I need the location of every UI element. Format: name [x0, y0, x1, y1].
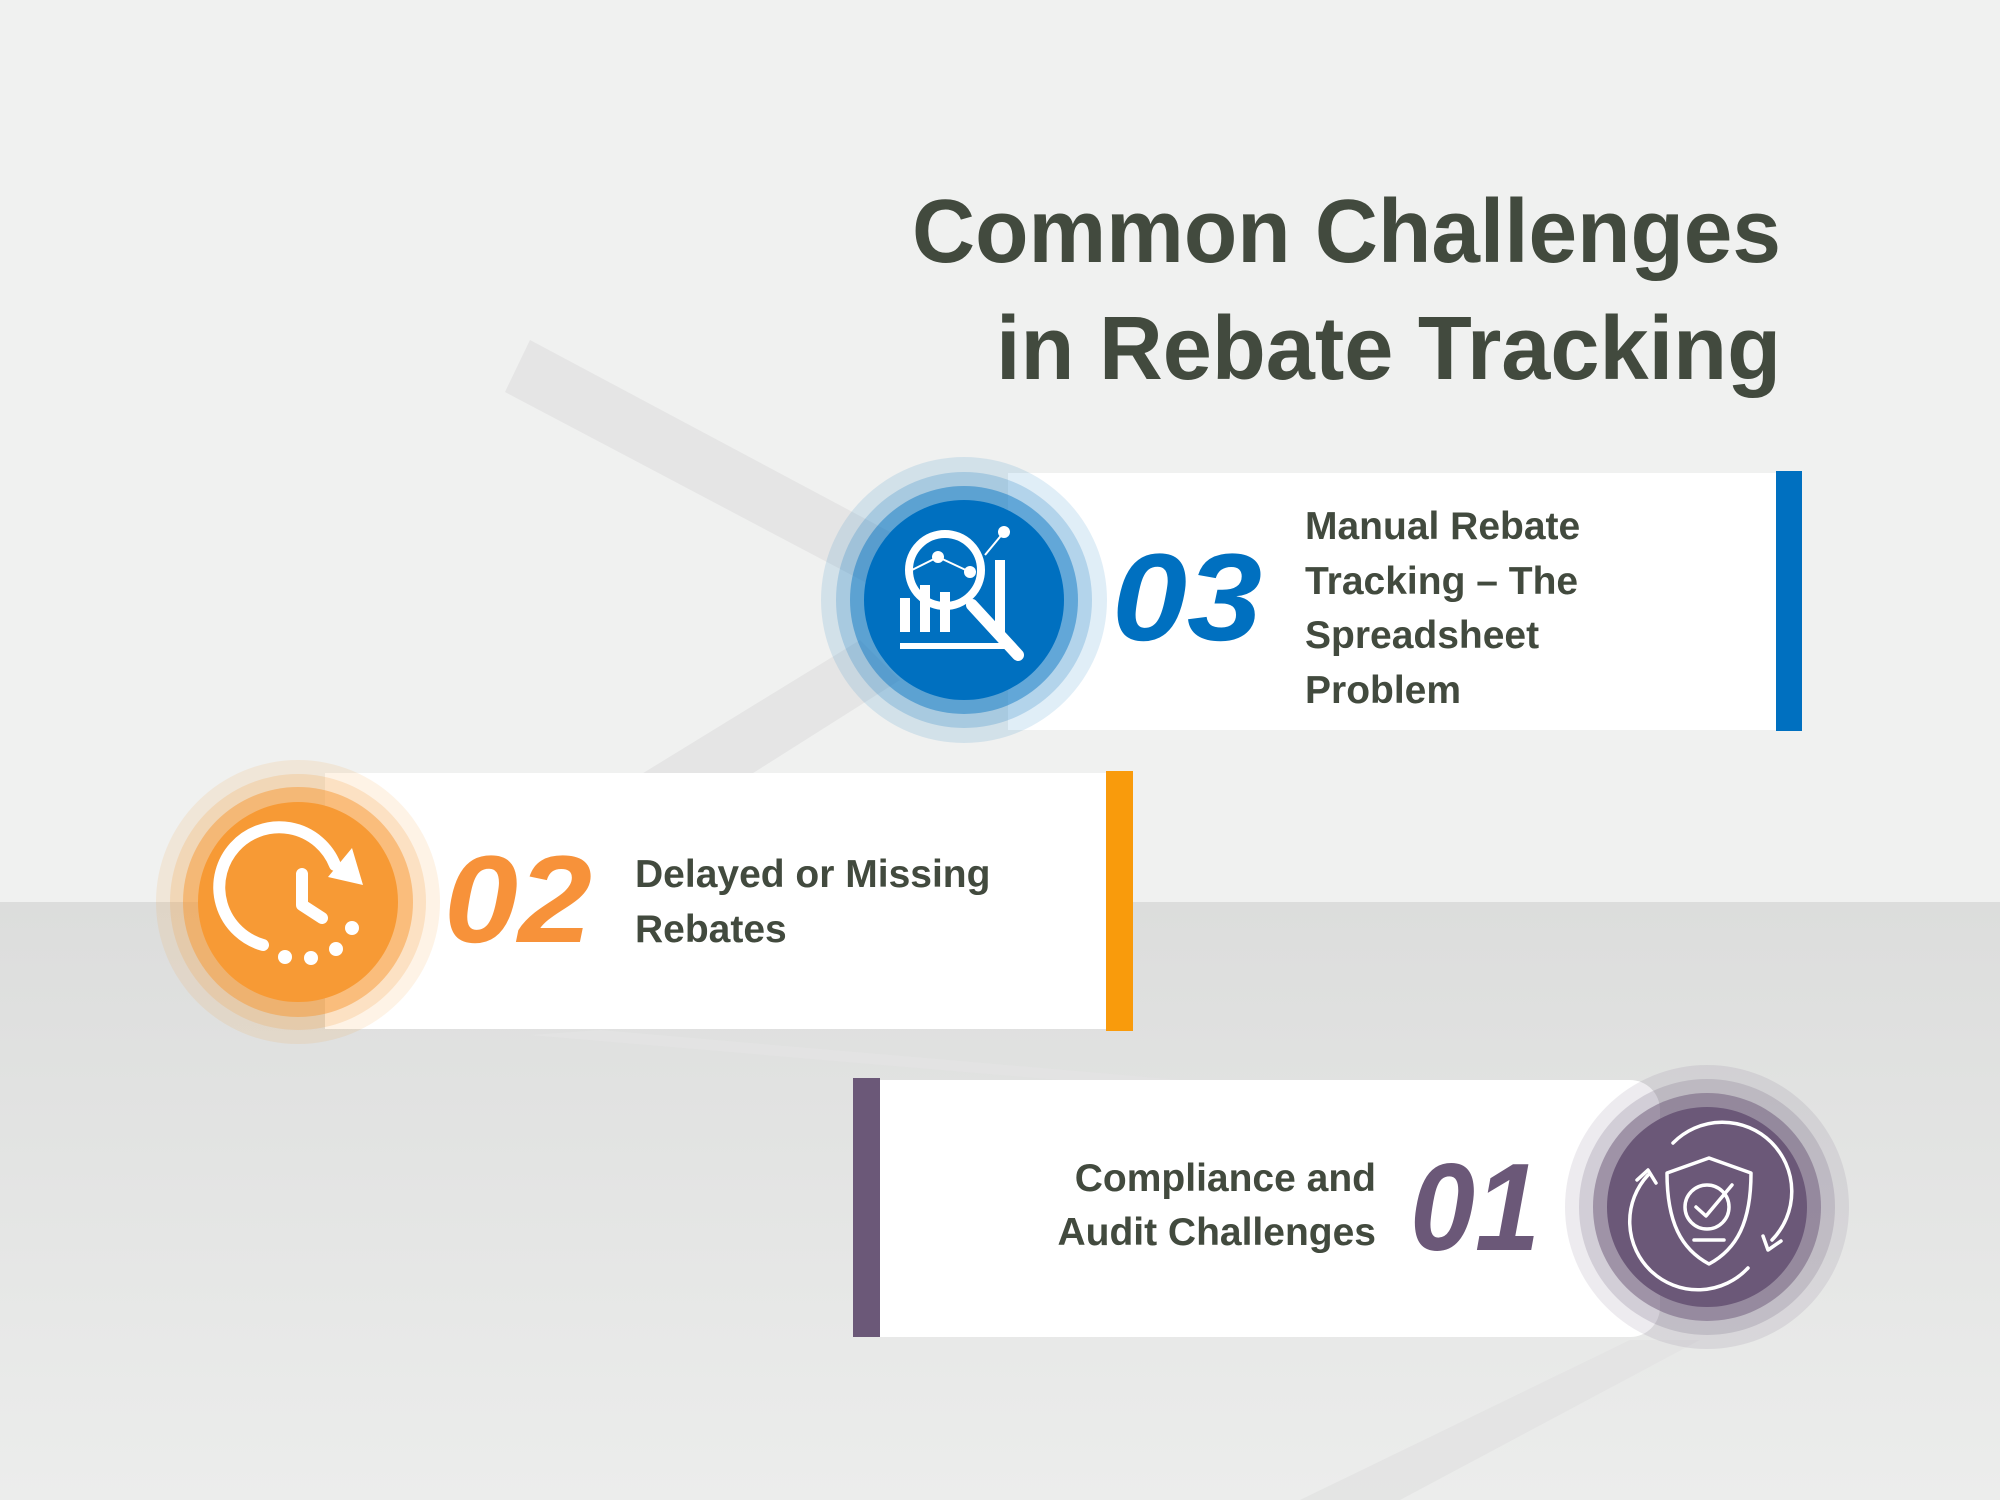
text: compliance and audit: Audit Challenges	[1057, 1211, 1376, 1254]
decorative stripes	[505, 340, 1700, 1500]
card 03: manual rebate tracking	[821, 457, 1802, 743]
text: delayed or missing	[635, 853, 990, 951]
icon: clock refresh (orange circle)	[156, 760, 440, 1044]
number 02: 02	[444, 831, 592, 969]
number 03: 03	[1112, 529, 1262, 667]
number 01: 01	[1410, 1139, 1540, 1277]
text: delayed or missing: Rebates	[635, 908, 787, 951]
text: compliance and audit	[1057, 1157, 1376, 1254]
text: manual rebate tracking: Spreadsheet	[1305, 614, 1539, 657]
card 01: compliance and audit	[853, 1065, 1849, 1349]
title: in Rebate Tracking	[996, 299, 1781, 399]
text: manual rebate tracking: Tracking – The	[1305, 560, 1578, 603]
title: Common Challenges	[912, 182, 1781, 282]
icon: shield check (purple circle)	[1565, 1065, 1849, 1349]
text: delayed or missing: Delayed or Missing	[635, 853, 990, 896]
text: compliance and audit: Compliance and	[1075, 1157, 1376, 1200]
icon: magnifier chart (blue circle)	[821, 457, 1107, 743]
card 02: delayed or missing rebates	[156, 760, 1133, 1044]
text: manual rebate tracking: Problem	[1305, 669, 1461, 712]
text: manual rebate tracking: Manual Rebate	[1305, 505, 1580, 548]
title	[912, 182, 1781, 399]
text: manual rebate tracking	[1305, 505, 1580, 712]
